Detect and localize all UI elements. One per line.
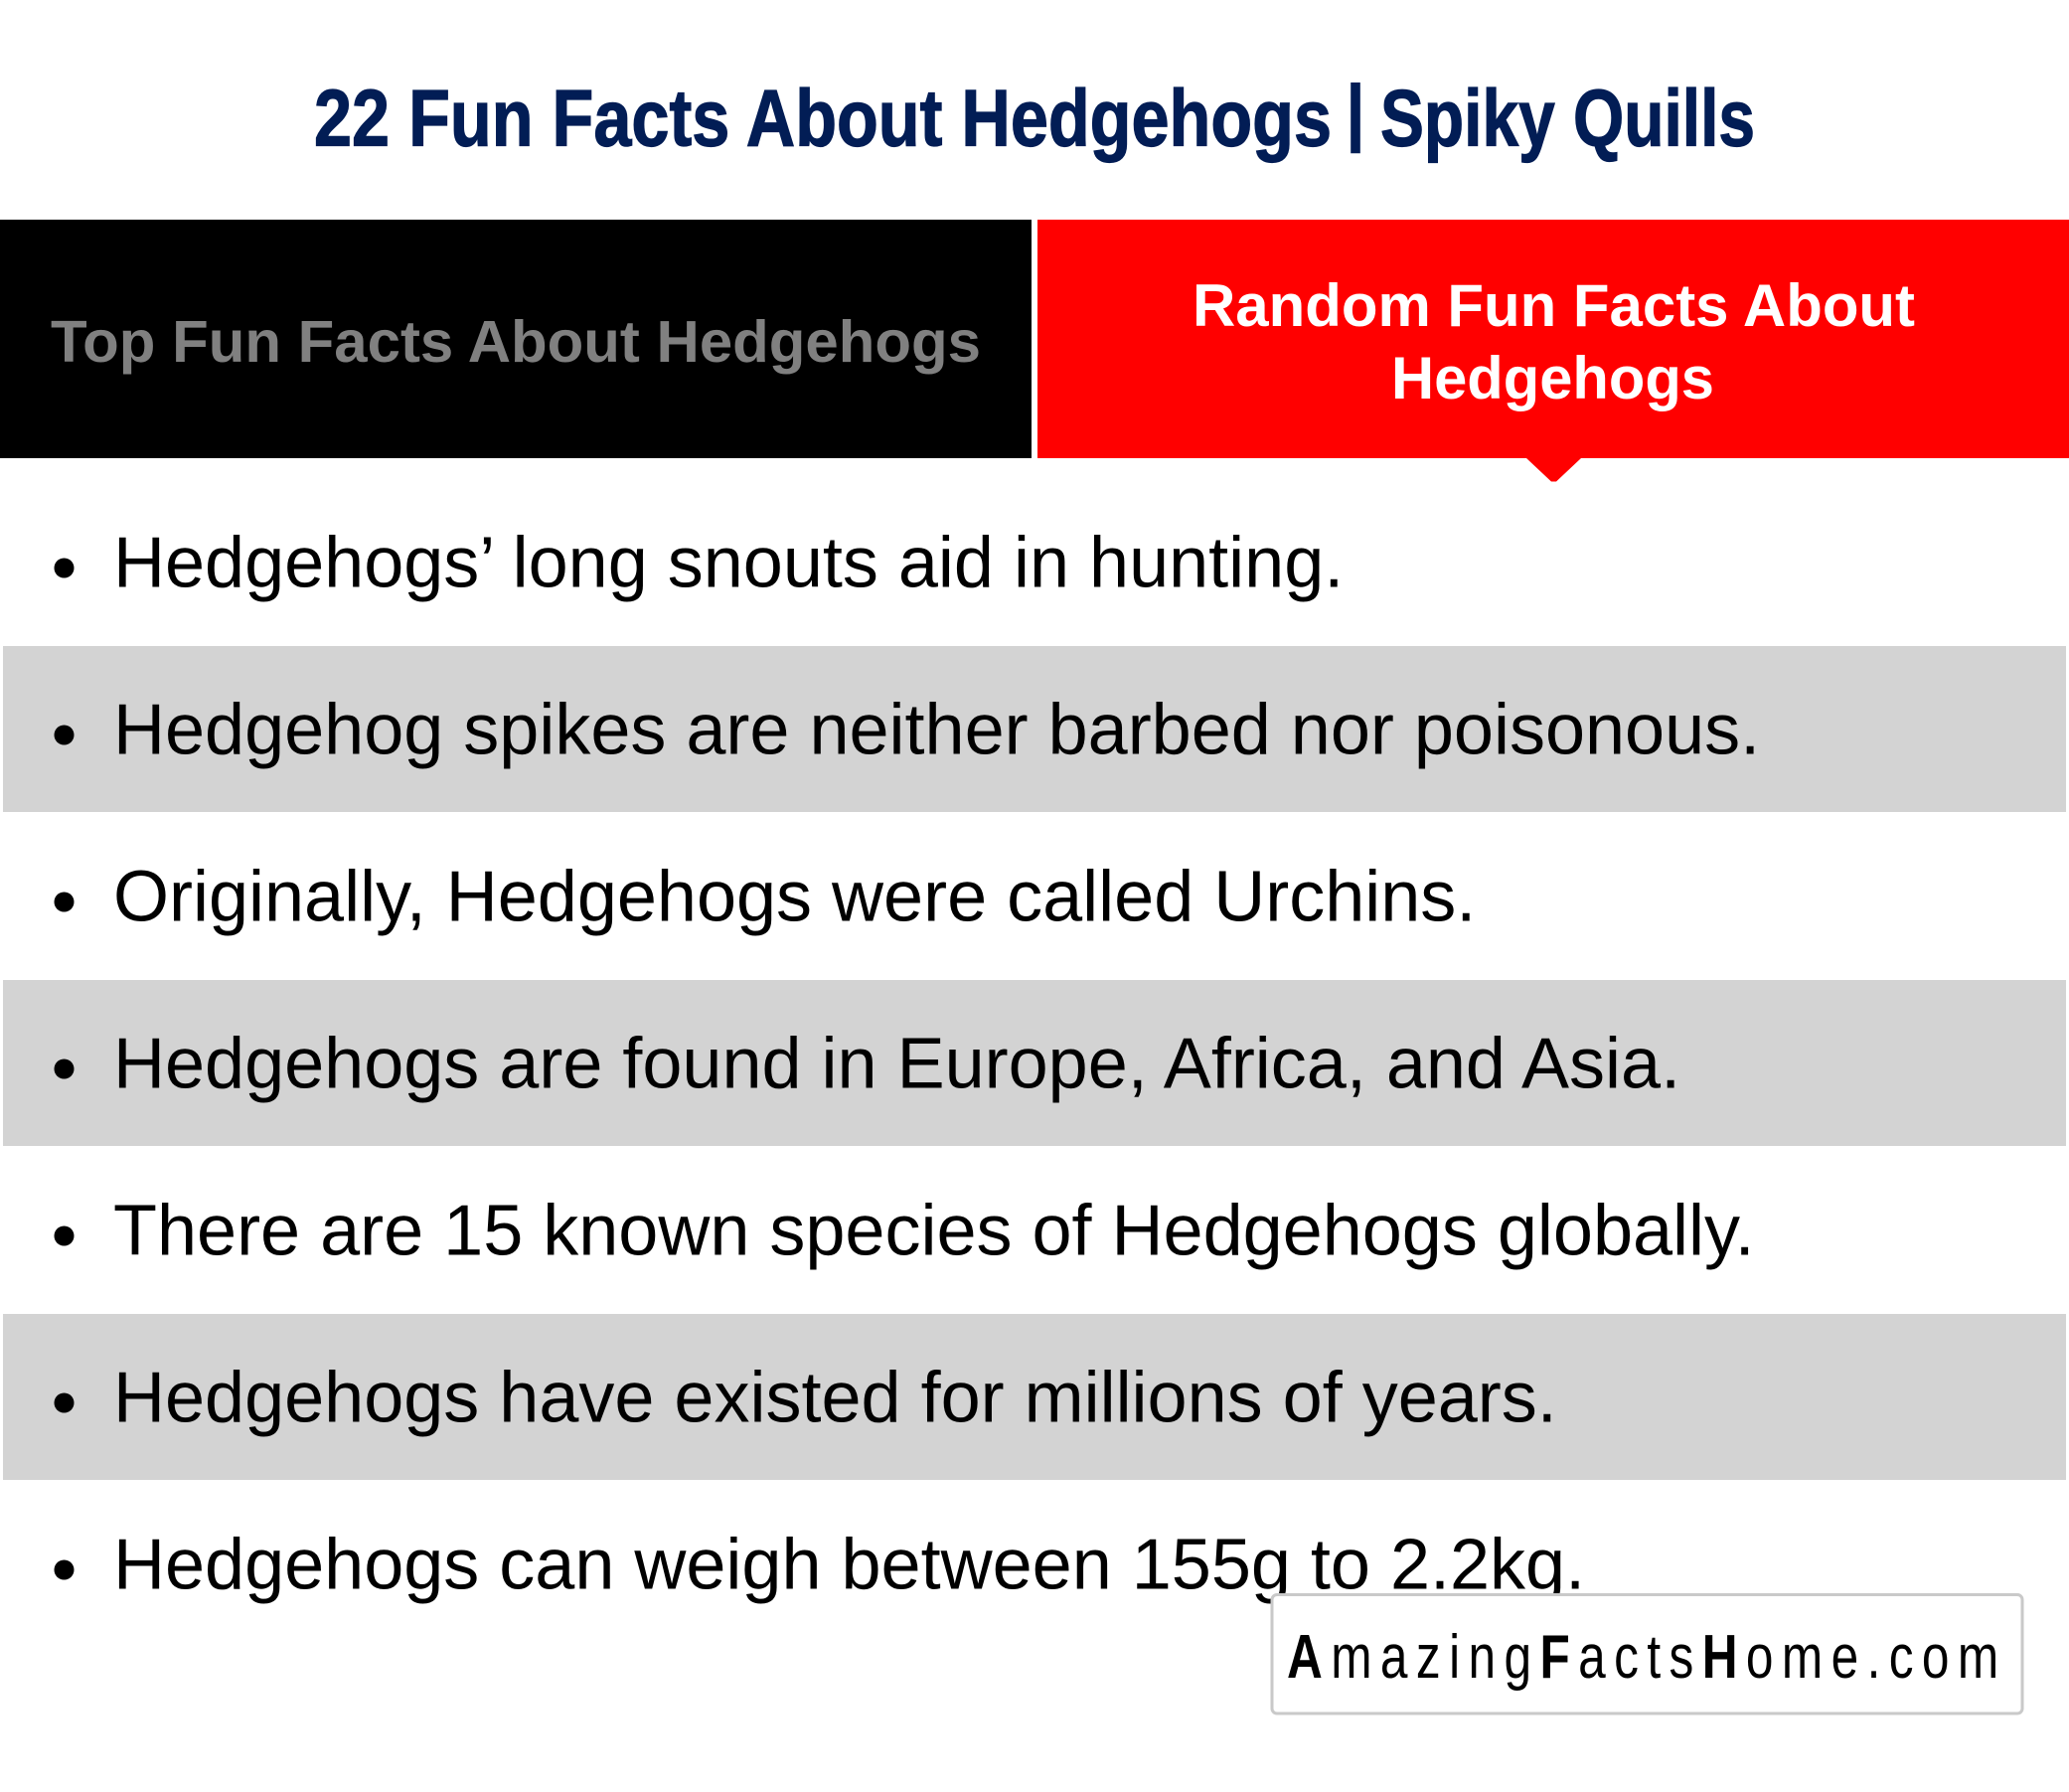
tab: random fun facts: Random Fun Facts About <box>1193 272 1915 339</box>
fact row 6 <box>3 1314 2066 1480</box>
tab: random fun facts <box>1037 220 2069 481</box>
tab: random fun facts: Hedgehogs <box>1391 345 1714 411</box>
title: 22 Fun Facts About Hedgehogs <box>314 74 1332 163</box>
fact row 6: Hedgehogs have existed for millions of years. <box>113 1358 1557 1437</box>
watermark box <box>1272 1594 2022 1713</box>
watermark box: AmazingFactsHome.com <box>1287 1622 2007 1691</box>
fact row 3: Originally, Hedgehogs were called Urchins. <box>113 857 1476 936</box>
fact row 2 <box>3 646 2066 812</box>
title: Spiky Quills <box>1380 74 1755 163</box>
fact row 4: Hedgehogs are found in Europe, Africa, and Asia. <box>113 1024 1680 1103</box>
tab: top fun facts: Top Fun Facts About Hedgehogs <box>51 309 981 375</box>
tab: top fun facts <box>0 220 1032 458</box>
fact row 2: Hedgehog spikes are neither barbed nor poisonous. <box>113 690 1760 769</box>
title: | <box>1346 70 1365 153</box>
fact row 7: Hedgehogs can weigh between 155g to 2.2kg. <box>113 1525 1585 1604</box>
fact row 4 <box>3 980 2066 1146</box>
fact row 5: There are 15 known species of Hedgehogs globally. <box>113 1191 1755 1270</box>
fact row 1: Hedgehogs’ long snouts aid in hunting. <box>113 523 1344 602</box>
